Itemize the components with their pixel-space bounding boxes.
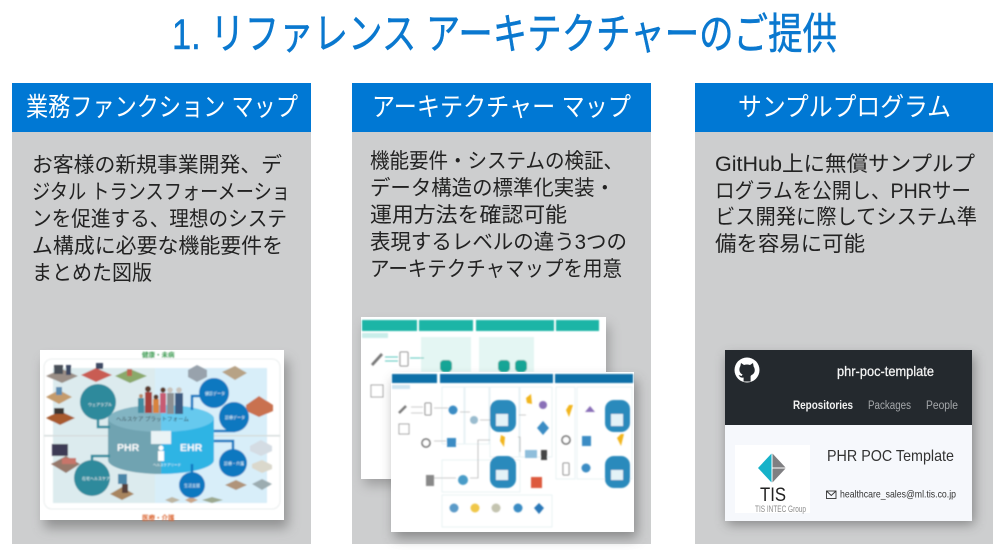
text block: sample program description: ビス開発に際してシステム準 — [715, 206, 977, 229]
chart: healthcare platform diagram — [40, 350, 288, 528]
card: GitHub organization page: People — [926, 400, 958, 412]
heading: sample program — [695, 83, 993, 132]
heading: sample program: サンプルプログラム — [738, 92, 951, 122]
text block: sample program description: ログラムを公開し、PHRサー — [715, 180, 971, 203]
chart: platform cylinder: PHR — [117, 442, 140, 454]
text block: sample program description: GitHub上に無償サンプルプ — [715, 153, 975, 176]
icon group: teal and blue data circles with connectors: 在宅ヘルスケア — [82, 475, 110, 481]
icon group: teal and blue data circles with connectors: 診療・介護 — [224, 460, 244, 466]
chart: healthcare platform diagram: 健康・未病 — [142, 350, 175, 359]
icon group: teal and blue data circles with connectors: 健診データ — [205, 390, 225, 396]
chart: platform cylinder — [108, 405, 214, 474]
text block: sample program description — [715, 153, 977, 256]
text block: business function description — [32, 154, 290, 285]
text block: architecture description — [370, 150, 627, 281]
logo: TIS INTEC Group — [735, 445, 810, 514]
heading: business function map: 業務ファンクション マップ — [26, 92, 298, 122]
card: GitHub organization page: PHR POC Template — [827, 448, 954, 465]
icon group: teal and blue data circles with connectors: ウェアラブル — [88, 401, 112, 407]
text block: architecture description: アーキテクチャマップを用意 — [370, 258, 622, 281]
text block: business function description: お客様の新規事業開発、デ — [32, 154, 282, 177]
chart: platform cylinder: ヘルスケア プラットフォーム — [116, 416, 189, 423]
text block: business function description: ンを促進する、理想のシステ — [32, 208, 287, 231]
text block: architecture description: 機能要件・システムの検証、 — [370, 150, 623, 173]
text block: architecture description: データ構造の標準化実装・ — [370, 177, 615, 200]
chart: front architecture sheet — [391, 372, 637, 538]
text block: sample program description: 備を容易に可能 — [715, 233, 865, 256]
icon group: healthcare facilities — [165, 365, 273, 503]
panel: architecture map — [352, 83, 651, 544]
text block: business function description: ジタル トランスフォーメーショ — [32, 181, 290, 204]
panel: sample program — [695, 83, 993, 544]
icon group: lifestyle scenes — [46, 363, 147, 500]
text block: architecture description: 表現するレベルの違う3つの — [370, 231, 627, 254]
title: 1. リファレンス アーキテクチャーのご提供 — [172, 11, 837, 59]
icon group: teal and blue data circles with connectors — [74, 378, 249, 498]
icon: envelope — [826, 491, 836, 498]
icon: GitHub logo — [734, 358, 760, 382]
logo: TIS INTEC Group: TIS — [760, 485, 786, 506]
chart: platform cylinder: ヘルスケアリード — [153, 462, 181, 467]
heading: architecture map — [352, 83, 651, 132]
text block: architecture description: 運用方法を確認可能 — [370, 204, 567, 227]
icon group: teal and blue data circles with connectors: 生活支援 — [184, 482, 200, 488]
chart: back architecture sheet — [361, 317, 609, 485]
card: GitHub organization page: Repositories — [793, 400, 853, 412]
card: GitHub organization page: healthcare_sales@ml.tis.co.jp — [840, 488, 956, 500]
icon group: teal and blue data circles with connectors: 診療データ — [225, 414, 245, 420]
logo: TIS INTEC Group: TIS INTEC Group — [755, 504, 806, 514]
card: GitHub organization page: phr-poc-template — [837, 363, 934, 379]
heading: architecture map: アーキテクチャー マップ — [372, 92, 631, 122]
chart: healthcare platform diagram: 医療・介護 — [142, 513, 175, 522]
card: GitHub organization page — [725, 350, 974, 524]
panel: business function map — [12, 83, 311, 544]
text block: business function description: ム構成に必要な機能要件を — [32, 235, 283, 258]
chart: platform cylinder: EHR — [180, 442, 203, 454]
text block: business function description: まとめた図版 — [32, 262, 152, 285]
icon: family group — [138, 386, 183, 414]
card: GitHub organization page: Packages — [868, 400, 911, 412]
heading: business function map — [12, 83, 311, 132]
